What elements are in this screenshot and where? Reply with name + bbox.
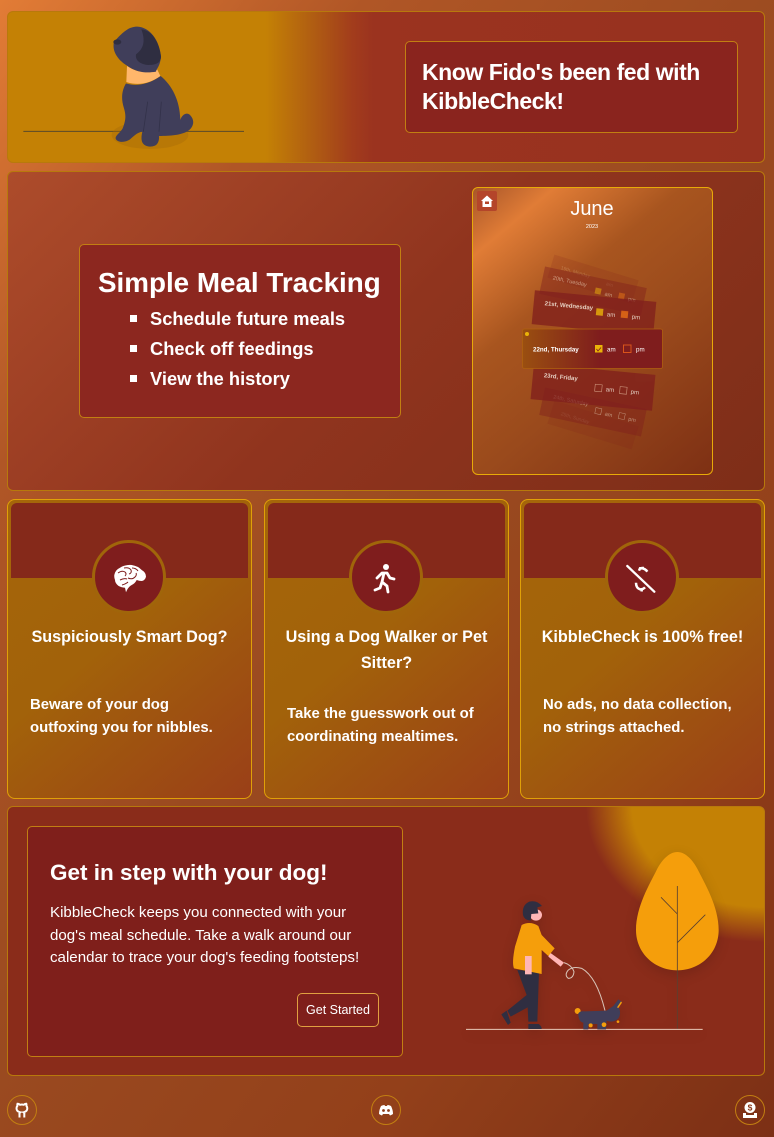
heading: Get in step with your dog! bbox=[50, 860, 328, 885]
heading box bbox=[405, 41, 738, 133]
footer icon: github bbox=[7, 1095, 37, 1125]
card text bbox=[30, 697, 213, 736]
day card: 22nd today: am bbox=[607, 346, 616, 354]
person bbox=[501, 901, 564, 1029]
card title: Suspiciously Smart Dog? bbox=[31, 628, 228, 646]
day card: 24th bbox=[539, 387, 647, 437]
body text: dog's meal schedule. Take a walk around our bbox=[50, 926, 351, 944]
card title bbox=[286, 628, 488, 672]
panel: meal tracking bbox=[7, 171, 765, 491]
heading bbox=[422, 59, 700, 114]
list item: Schedule future meals bbox=[150, 308, 345, 329]
day card: 22nd today bbox=[522, 329, 662, 368]
feature box bbox=[79, 244, 401, 418]
day card: 20th bbox=[539, 266, 647, 316]
card text: outfoxing you for nibbles. bbox=[30, 720, 213, 736]
feature list bbox=[130, 308, 345, 389]
illustration: person walking dog by tree bbox=[466, 852, 720, 1034]
leash bbox=[564, 963, 605, 1011]
footer icon: donate: $ bbox=[748, 1102, 753, 1112]
footer icon: donate bbox=[735, 1095, 765, 1125]
list item: Check off feedings bbox=[150, 338, 314, 359]
card: dog walker bbox=[264, 499, 509, 799]
ground line bbox=[466, 1028, 703, 1031]
day card: 23rd: am bbox=[605, 387, 614, 394]
heading: Simple Meal Tracking bbox=[98, 267, 381, 298]
heading: Know Fido's been fed with bbox=[422, 59, 700, 85]
day card: 21st: pm bbox=[631, 315, 640, 321]
day card: 20th: am bbox=[604, 292, 613, 299]
text box bbox=[27, 826, 403, 1057]
icon: walking person bbox=[349, 540, 423, 614]
body text: calendar to trace your dog's feeding footsteps! bbox=[50, 949, 359, 966]
button bbox=[297, 993, 379, 1027]
day card: 23rd: 23rd, Friday bbox=[544, 373, 579, 383]
card: free bbox=[520, 499, 765, 799]
list item: View the history bbox=[150, 368, 290, 389]
button: Get Started bbox=[306, 1003, 370, 1017]
card text: Take the guesswork out of bbox=[287, 706, 474, 722]
day card: 24th: am bbox=[604, 412, 613, 419]
card header band bbox=[524, 503, 761, 578]
icon: no dollar bbox=[605, 540, 679, 614]
card text bbox=[543, 697, 732, 736]
card text: coordinating mealtimes. bbox=[287, 729, 458, 745]
footer icon: discord bbox=[371, 1095, 401, 1125]
day card: 19th: am bbox=[605, 281, 614, 289]
icon: home button bbox=[477, 191, 497, 211]
day card: 25th bbox=[547, 401, 639, 449]
panel: call to action bbox=[7, 806, 765, 1076]
month title: June bbox=[570, 198, 614, 220]
day card: 23rd bbox=[531, 363, 655, 411]
day card: 20th: pm bbox=[627, 297, 637, 304]
card text bbox=[287, 706, 474, 745]
illustration: sitting dog bbox=[23, 26, 244, 149]
day card: 25th: 25th, Sunday bbox=[560, 411, 590, 426]
day card: 22nd today: pm bbox=[636, 346, 645, 354]
day card: 21st bbox=[532, 290, 656, 336]
body text: KibbleCheck keeps you connected with your bbox=[50, 904, 346, 921]
body text bbox=[50, 904, 359, 966]
day card: 21st: am bbox=[607, 312, 615, 319]
card text: No ads, no data collection, bbox=[543, 697, 732, 713]
card text: Beware of your dog bbox=[30, 697, 169, 713]
day card: 24th: 24th, Saturday bbox=[553, 394, 589, 408]
tree bbox=[636, 852, 719, 1029]
card title: KibbleCheck is 100% free! bbox=[542, 628, 743, 646]
icon: brain bbox=[92, 540, 166, 614]
day card: 24th: pm bbox=[628, 417, 637, 424]
day card: 19th bbox=[547, 255, 639, 303]
day card: 20th: 20th, Tuesday bbox=[552, 275, 587, 289]
card title: Using a Dog Walker or Pet bbox=[286, 628, 487, 646]
day card: 21st: 21st, Wednesday bbox=[544, 301, 594, 312]
year: 2023 bbox=[586, 224, 598, 230]
card text: no strings attached. bbox=[543, 720, 684, 736]
app screenshot: calendar bbox=[472, 187, 713, 475]
day card: 19th: 19th, Monday bbox=[560, 265, 591, 280]
panel: hero bbox=[7, 11, 765, 163]
day card: 23rd: pm bbox=[630, 390, 639, 396]
small dog bbox=[575, 999, 622, 1029]
card: smart dog bbox=[7, 499, 252, 799]
card title: Sitter? bbox=[361, 654, 412, 672]
day card: 22nd today: 22nd, Thursday bbox=[533, 346, 579, 354]
card header band bbox=[11, 503, 248, 578]
card header band bbox=[268, 503, 505, 578]
heading: KibbleCheck! bbox=[422, 88, 564, 114]
